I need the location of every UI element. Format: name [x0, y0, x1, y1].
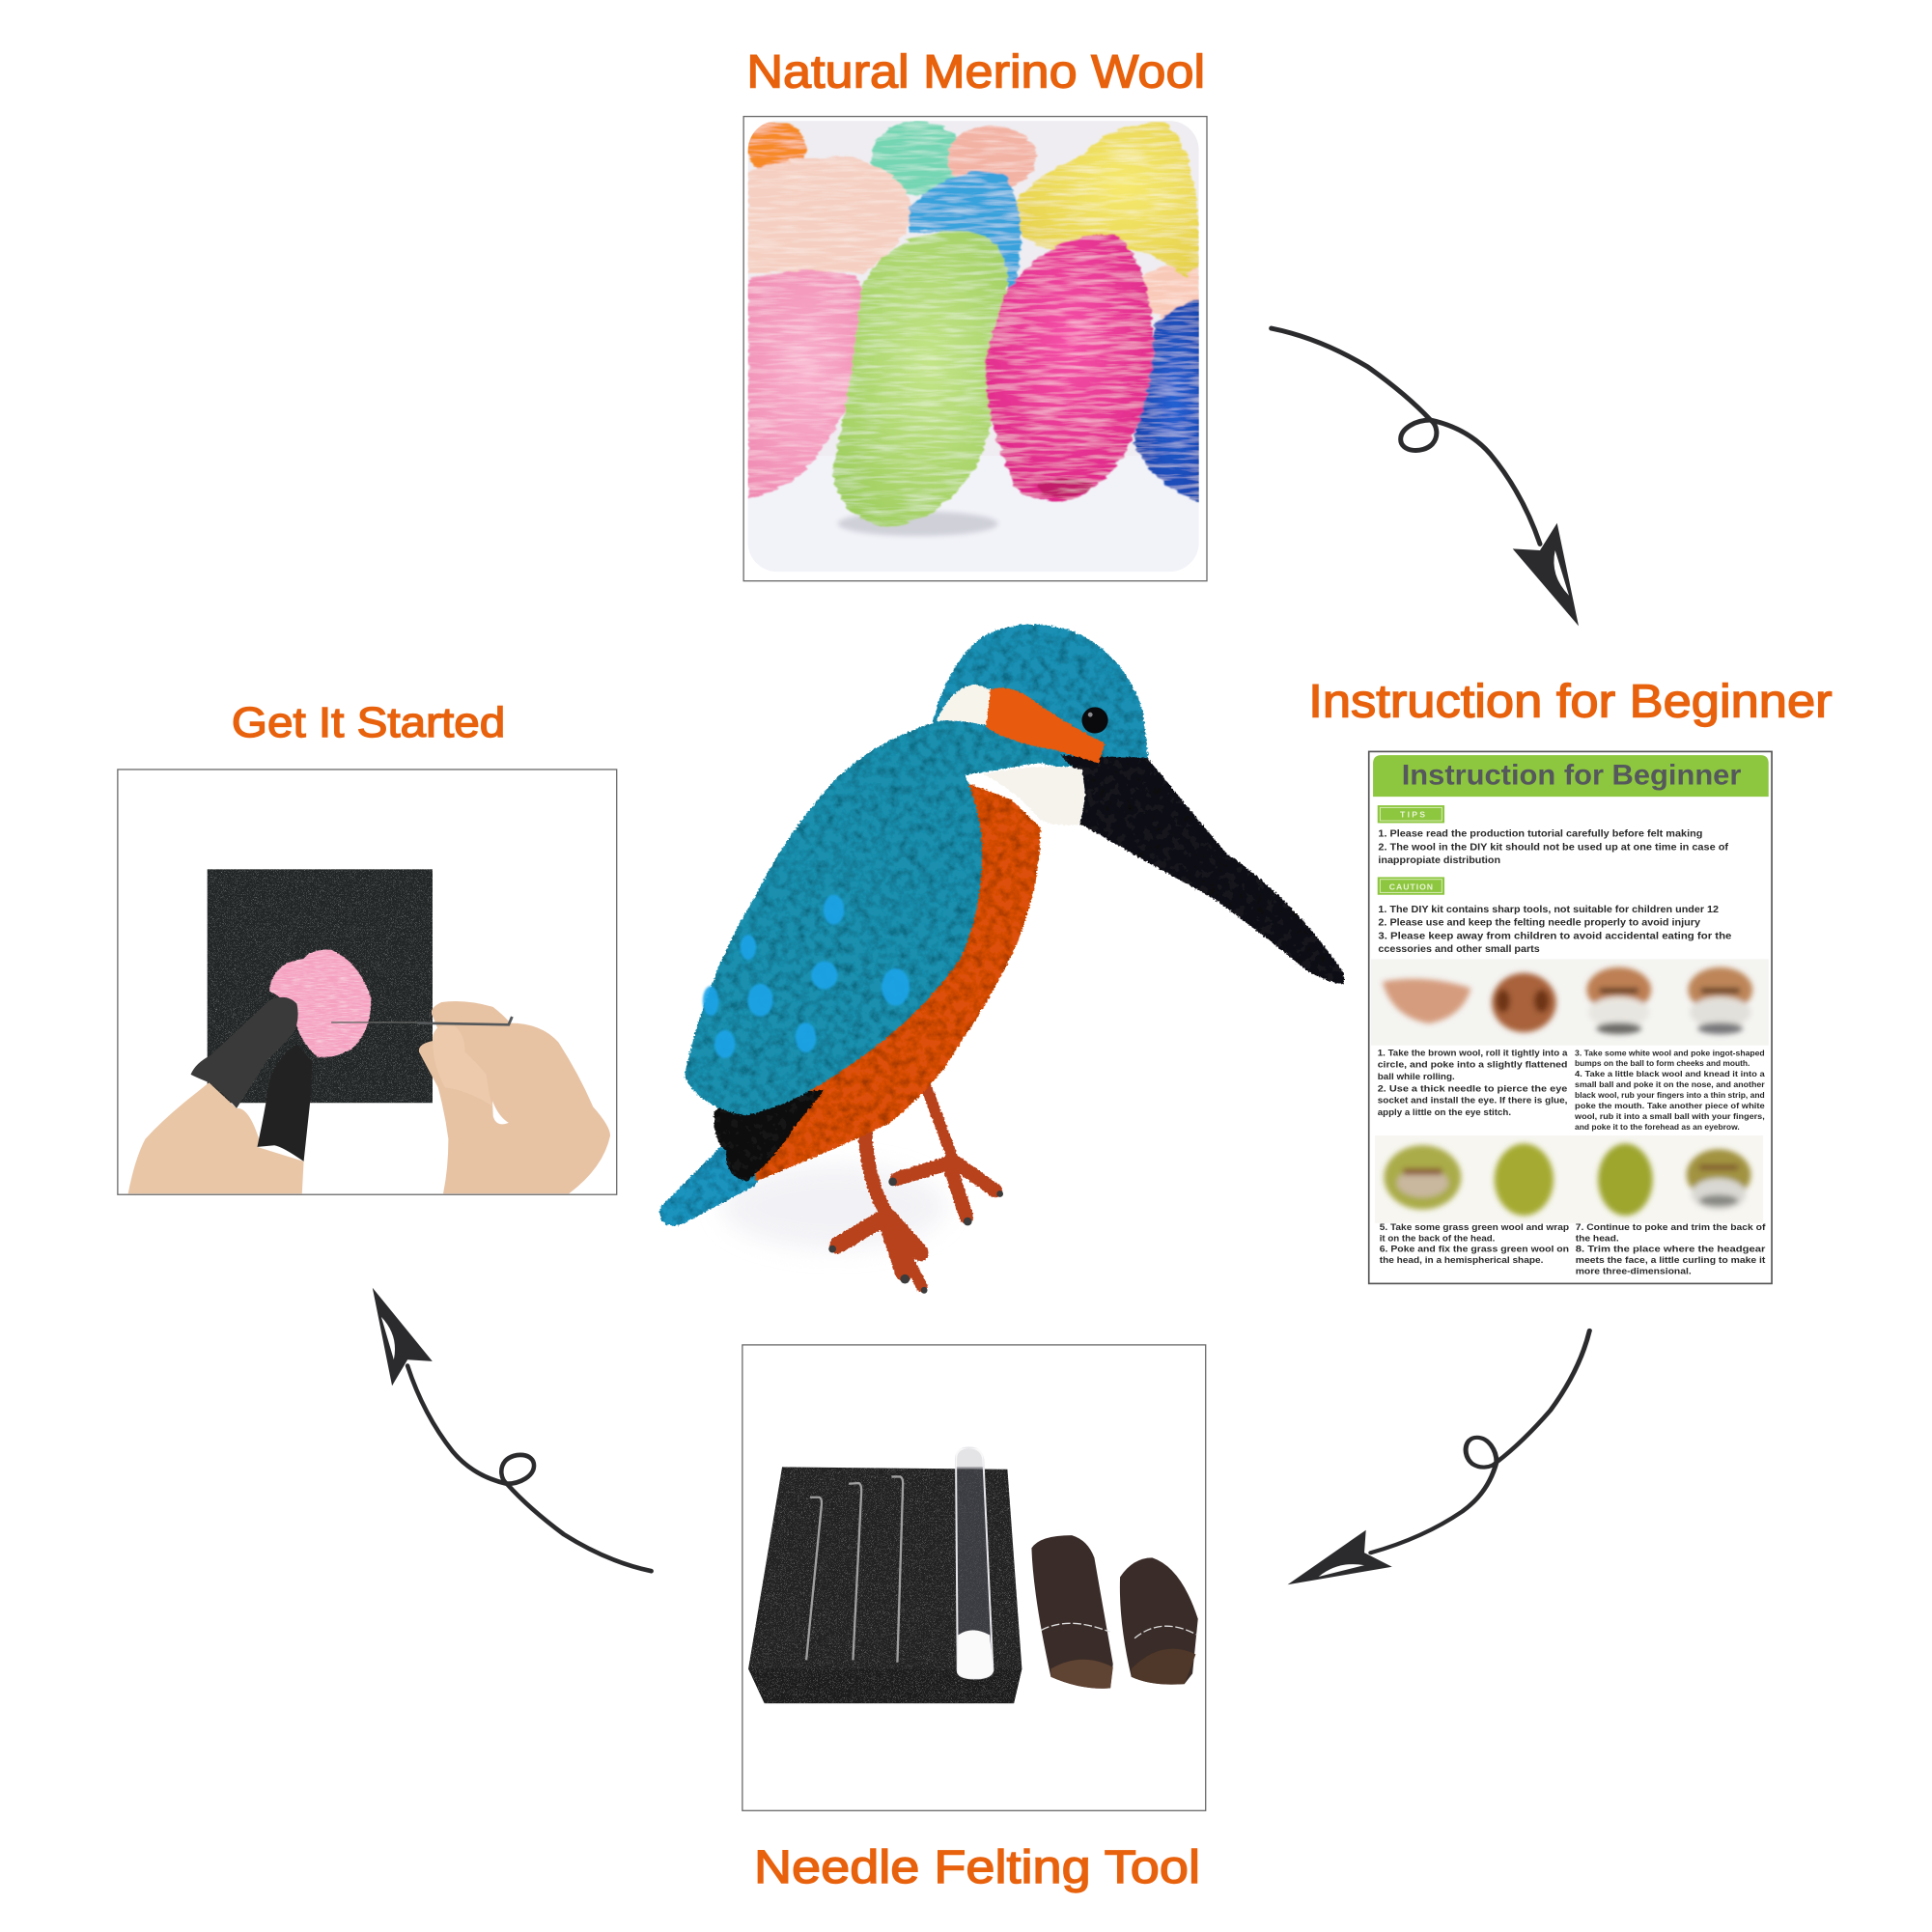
finger cot two — [257, 1044, 312, 1162]
tips badge: TIPS — [1400, 810, 1425, 820]
steps 5-6 text: the head, in a hemispherical shape. — [1380, 1255, 1543, 1265]
tips text — [1378, 829, 1729, 866]
caution badge — [1378, 877, 1444, 895]
right hand — [419, 1001, 610, 1193]
steps 5-6 text: it on the back of the head. — [1380, 1233, 1495, 1243]
caution text: 2. Please use and keep the felting needle properly to avoid injury — [1378, 918, 1701, 929]
dark under-wing — [714, 1090, 825, 1181]
needle — [331, 1017, 512, 1024]
felting needles — [806, 1476, 903, 1663]
black foam mat — [208, 869, 433, 1103]
steps 3-4 text: bumps on the ball to form cheeks and mouth. — [1575, 1058, 1750, 1068]
beak — [1061, 755, 1344, 985]
heading: Natural Merino Wool: Natural Merino Wool — [746, 46, 1205, 98]
steps 3-4 text: poke the mouth. Take another piece of white — [1575, 1101, 1765, 1110]
eye — [1081, 707, 1108, 734]
steps 7-8 text: more three-dimensional. — [1576, 1266, 1692, 1275]
panel: get it started photo — [118, 770, 617, 1194]
wing spots — [703, 895, 910, 1058]
tips text: 2. The wool in the DIY kit should not be used up at one time in case of — [1378, 842, 1729, 853]
orange belly — [745, 771, 1041, 1181]
steps 3-4 text: wool, rub it into a small ball with your fingers, — [1574, 1111, 1765, 1121]
tail — [659, 1141, 777, 1226]
caution text: 3. Please keep away from children to avoid accidental eating for the — [1378, 931, 1732, 941]
orange cheek — [986, 687, 1106, 764]
glass tube — [956, 1447, 993, 1678]
thumb — [433, 1025, 493, 1106]
arrow: tool back to started — [373, 1288, 652, 1571]
neck white patch — [937, 685, 992, 726]
blurred step photos row 1 — [1371, 959, 1769, 1046]
steps 3-4 text: 4. Take a little black wool and knead it into a — [1575, 1069, 1765, 1078]
legs and toes — [837, 1087, 995, 1286]
steps 1-2 text: circle, and poke into a slightly flattened — [1378, 1060, 1567, 1070]
steps 5-6 text: 5. Take some grass green wool and wrap — [1380, 1222, 1570, 1232]
pink wool ball — [269, 950, 371, 1057]
arrow: wool to instruction — [1272, 328, 1579, 626]
steps 7-8 text: 8. Trim the place where the headgear — [1576, 1245, 1766, 1254]
steps 7-8 text: 7. Continue to poke and trim the back of — [1576, 1222, 1767, 1232]
steps 3-4 text: and poke it to the forehead as an eyebrow. — [1575, 1122, 1740, 1132]
left hand — [128, 1082, 304, 1193]
tips badge — [1378, 805, 1444, 823]
caution text — [1378, 905, 1732, 955]
panel: needle felting tools photo — [742, 1345, 1206, 1810]
steps 3-4 text: 3. Take some white wool and poke ingot-shaped — [1575, 1048, 1765, 1057]
heading: Get It Started: Get It Started — [232, 700, 505, 746]
soft shadow — [721, 1164, 946, 1249]
caution text: 1. The DIY kit contains sharp tools, not suitable for children under 12 — [1378, 905, 1720, 915]
toe claws — [828, 1178, 1003, 1294]
leather finger cot small — [1120, 1557, 1198, 1685]
sheet header bar — [1373, 755, 1769, 797]
steps 5-6 text: 6. Poke and fix the grass green wool on — [1380, 1245, 1569, 1254]
heading: Instruction for Beginner: Instruction for Beginner — [1308, 676, 1833, 728]
wing and neck — [684, 721, 1053, 1116]
heading: Needle Felting Tool: Needle Felting Tool — [754, 1841, 1200, 1893]
panel: merino wool photo — [743, 117, 1207, 581]
steps 1-2 text: ball while rolling. — [1378, 1072, 1455, 1081]
steps 3-4 text: small ball and poke it on the nose, and another — [1575, 1079, 1766, 1089]
head — [932, 624, 1148, 767]
central felted kingfisher bird — [659, 624, 1344, 1294]
steps 1-2 text — [1378, 1048, 1568, 1117]
throat white patch — [984, 767, 1085, 826]
steps 7-8 text: the head. — [1576, 1233, 1619, 1243]
panel: instruction sheet — [1369, 751, 1772, 1283]
caution badge: CAUTION — [1389, 882, 1433, 891]
arrow: instruction to tool — [1288, 1330, 1589, 1584]
steps 1-2 text: apply a little on the eye stitch. — [1378, 1107, 1511, 1117]
tips text: inappropiate distribution — [1378, 855, 1500, 866]
foam block — [748, 1467, 1022, 1703]
steps 7-8 text — [1576, 1222, 1767, 1275]
steps 1-2 text: 1. Take the brown wool, roll it tightly into a — [1378, 1048, 1568, 1057]
leather finger cot large — [1031, 1535, 1113, 1689]
steps 3-4 text: black wool, rub your fingers into a thin strip, and — [1575, 1090, 1765, 1100]
sheet title: Instruction for Beginner — [1402, 760, 1741, 792]
finger cot one — [191, 997, 298, 1108]
steps 5-6 text — [1380, 1222, 1570, 1265]
steps 7-8 text: meets the face, a little curling to make it — [1576, 1255, 1765, 1265]
tips text: 1. Please read the production tutorial carefully before felt making — [1378, 829, 1702, 840]
caution text: ccessories and other small parts — [1378, 944, 1540, 955]
steps 3-4 text — [1574, 1048, 1766, 1132]
blurred step photos row 2 — [1375, 1135, 1763, 1223]
steps 1-2 text: socket and install the eye. If there is glue, — [1378, 1096, 1567, 1106]
gap between fingers — [492, 1101, 509, 1124]
steps 1-2 text: 2. Use a thick needle to pierce the eye — [1378, 1083, 1567, 1093]
